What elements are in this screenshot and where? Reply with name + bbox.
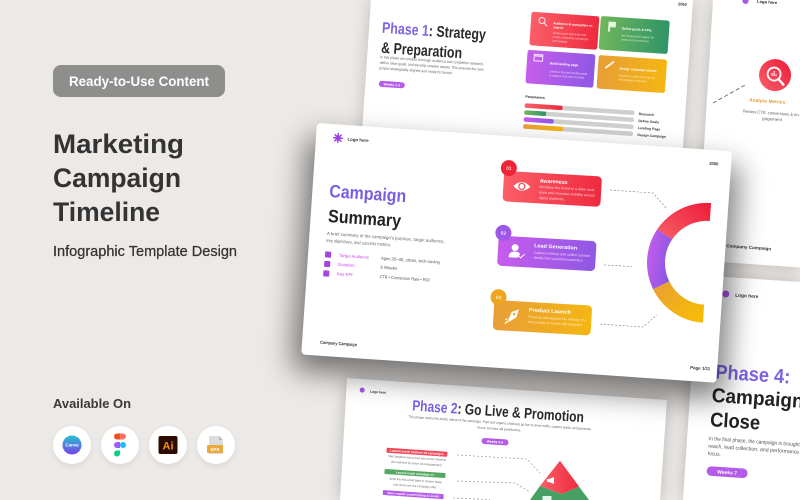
footer: Page 1/11 xyxy=(690,365,711,371)
donut segment: purple xyxy=(645,229,673,290)
row: social ads: Launch social platform ad campaigns xyxy=(390,449,444,456)
row: email: and announce the campaign offer. xyxy=(393,482,437,489)
card: lead generation: Capture interest and collect contact xyxy=(534,251,590,258)
card: product launch: Promote and support the release of a xyxy=(528,315,587,322)
footer xyxy=(320,340,711,371)
pyramid green tier xyxy=(530,486,589,500)
panel: phase 1 slide xyxy=(354,0,693,250)
heading: campaign summary: Summary xyxy=(328,206,402,231)
icon: adobe illustrator: Ai xyxy=(162,440,174,452)
card: landing page: Create a focused landing page xyxy=(549,69,588,76)
card: awareness: ence and increase visibility across xyxy=(539,190,595,198)
heading: phase 4: Phase 4: xyxy=(715,361,791,388)
heading: phase 1: Phase 1: Strategy xyxy=(382,20,487,44)
analyze metrics slide content xyxy=(726,0,800,253)
icon: eye xyxy=(513,182,531,191)
card: goals: Set measurable targets for xyxy=(621,33,654,40)
logo: Logo here xyxy=(370,390,386,395)
card: campaign assets: all campaign channels xyxy=(619,77,647,83)
row: organic content xyxy=(383,490,444,499)
card: product launch xyxy=(489,289,593,336)
chart: pyramid xyxy=(530,461,589,500)
row: social ads: and optimize by reach and engagement. xyxy=(391,460,443,467)
heading: phase 1 xyxy=(380,20,487,64)
card: product launch: 03 xyxy=(496,295,502,301)
title: Campaign xyxy=(53,163,181,193)
page number: 2050 xyxy=(678,1,688,7)
pyramid red tier xyxy=(540,461,579,494)
panel: phase 4 slide xyxy=(683,275,800,500)
description: reach, lead collection, and performance xyxy=(708,444,799,456)
chart: parameters progress bars: Landing Page xyxy=(638,126,660,131)
pill: weeks: Weeks 1-2 xyxy=(383,82,400,87)
card: lead generation xyxy=(494,224,597,271)
card: awareness: Introduce the brand to a wider audi- xyxy=(539,185,595,192)
card: landing page: to capture and convert leads xyxy=(549,73,585,80)
logo xyxy=(333,133,370,145)
logo xyxy=(742,0,778,6)
card: landing page xyxy=(525,50,596,88)
pill: weeks 7 xyxy=(706,466,748,478)
logo xyxy=(722,290,759,300)
card: landing page: Build landing page xyxy=(550,61,579,67)
list: campaign facts: 8 Weeks xyxy=(380,265,398,271)
heading: analyze metrics: Analyze Metrics xyxy=(749,97,786,106)
chart: parameters progress bars: Parameters xyxy=(525,95,545,100)
icon: rocket xyxy=(508,309,519,322)
card: lead generation: Lead Generation xyxy=(534,243,577,252)
heading: phase 2: Phase 2: Go Live & Promotion xyxy=(412,398,584,426)
description: gagement xyxy=(762,116,783,122)
description: key objectives, and success metrics. xyxy=(326,238,392,247)
description: define clear goals, and develop creative assets. This ensures the next xyxy=(380,61,484,72)
description: A brief summary of the campaign's purpose, target audience, xyxy=(327,231,445,244)
list: campaign facts: Ages 20–40, urban, tech-saving xyxy=(381,256,441,265)
card: audience research: search xyxy=(553,25,564,30)
arrow: main slide dashed connectors xyxy=(600,190,666,327)
card: goals: reach and conversions xyxy=(621,37,650,43)
chart: parameters progress bars: Research xyxy=(639,112,654,117)
pill: weeks 3-6 xyxy=(481,438,509,446)
card: campaign assets: Produce visuals and copy for xyxy=(619,73,655,80)
description: This phase marks the public rollout of the campaign. Paid and organic channels go live to drive traffic, capture leads, and generate xyxy=(408,415,591,431)
card: lead generation: details from potential customers. xyxy=(533,256,584,263)
description: buzz across all platforms. xyxy=(477,425,522,432)
row: organic content: Start organic content (blog & social) xyxy=(387,491,439,498)
icon: figma xyxy=(101,426,139,464)
card: product launch: new product or service and education xyxy=(528,320,582,327)
heading: available on: Available On xyxy=(53,396,131,411)
pill: weeks 3-6: Weeks 3-6 xyxy=(487,439,503,445)
card: audience research: Study target segments and xyxy=(553,31,587,37)
heading: phase 4: Close xyxy=(709,409,761,435)
badge: ready-to-use content: Ready-to-Use Content xyxy=(69,73,209,89)
description: In this phase we conduct thorough audience and competitor research, xyxy=(380,55,484,66)
logo xyxy=(360,387,386,395)
heading: campaign summary: Campaign xyxy=(329,181,407,206)
heading: campaign summary xyxy=(327,181,407,231)
heading: phase 4 xyxy=(709,361,800,437)
row: social ads xyxy=(386,448,448,467)
arrow: phase 2 dashed connectors xyxy=(453,455,540,500)
chart: parameters progress bars: Define Goals xyxy=(638,119,659,124)
chart: donut xyxy=(643,199,711,323)
panel: phase 2 slide xyxy=(340,378,667,500)
icon: canva: Canva xyxy=(65,442,79,448)
list: campaign facts xyxy=(323,251,441,284)
title xyxy=(53,129,184,227)
logo: Logo here xyxy=(735,293,759,300)
description xyxy=(742,109,800,123)
card: audience research xyxy=(529,12,599,50)
card: goals: Define goals & KPIs xyxy=(622,26,652,32)
arrow: analyze metrics dashed connector xyxy=(713,84,747,103)
left heading panel xyxy=(53,65,237,260)
title: Marketing xyxy=(53,129,184,159)
list: campaign facts: Target Audience xyxy=(339,253,370,260)
card: product launch: Product Launch xyxy=(529,307,571,316)
list: campaign facts: Duration xyxy=(338,262,355,268)
subtitle: Infographic Template Design xyxy=(53,244,237,260)
card: awareness: 01 xyxy=(506,166,512,172)
footer: Company Campaign xyxy=(726,243,772,251)
panel: campaign summary main slide xyxy=(292,122,740,399)
card: awareness xyxy=(499,160,603,207)
phase 4 slide content xyxy=(706,290,800,482)
phase 1 slide content xyxy=(376,0,688,140)
list: campaign facts: CTR • Conversion Rate • ROI xyxy=(380,274,430,283)
phase 2 slide content xyxy=(353,387,593,500)
icon: megaphone xyxy=(547,477,554,484)
badge: ready-to-use content xyxy=(53,65,225,97)
row: email: Send the first email blast to nurture leads xyxy=(389,477,442,484)
card: audience research: Audience & competitor re- xyxy=(553,21,593,28)
description xyxy=(326,231,445,251)
icon: adobe illustrator xyxy=(149,426,187,464)
logo: Logo here xyxy=(347,137,369,143)
icon: eps file xyxy=(197,426,235,464)
heading: phase 1: & Preparation xyxy=(381,40,463,62)
available on section xyxy=(53,396,235,464)
card: audience research: and insights xyxy=(552,39,568,44)
description xyxy=(379,55,485,77)
card: audience research: review competing campaigns xyxy=(552,35,589,41)
card: campaign assets xyxy=(597,55,667,93)
list: campaign facts: Key KPI xyxy=(337,271,353,277)
title: Timeline xyxy=(53,197,160,227)
pill: weeks xyxy=(379,81,405,88)
description xyxy=(708,436,800,463)
donut segment: orange xyxy=(651,280,706,323)
icon: analytics circle xyxy=(758,58,792,92)
card: campaign assets: Design campaign assets xyxy=(619,66,657,73)
card: goals xyxy=(599,16,670,54)
card: awareness: digital platforms. xyxy=(539,196,565,201)
row: email: Launch email campaign #1 xyxy=(396,470,434,477)
icon: envelope xyxy=(542,496,552,500)
description: project strategically aligned and ready for launch. xyxy=(379,66,453,75)
donut segment: red xyxy=(657,199,711,242)
card: awareness: Awareness xyxy=(539,178,568,186)
row: email xyxy=(384,469,446,490)
chart: parameters progress bars xyxy=(523,95,668,139)
panel: analyze metrics slide xyxy=(697,0,800,268)
chart: parameters progress bars: Design Campaign xyxy=(637,133,666,139)
description: focus. xyxy=(708,451,721,458)
card: lead generation: 02 xyxy=(501,231,507,237)
icon: person check xyxy=(511,244,519,251)
footer: Company Campaign xyxy=(320,340,357,347)
row: social ads: Start targeted ads across key social channels xyxy=(388,454,447,462)
page code: 2050 xyxy=(709,161,719,166)
icon: canva xyxy=(53,426,91,464)
pill: weeks 7: Weeks 7 xyxy=(717,469,737,477)
icon: eps file: EPS xyxy=(210,447,220,452)
